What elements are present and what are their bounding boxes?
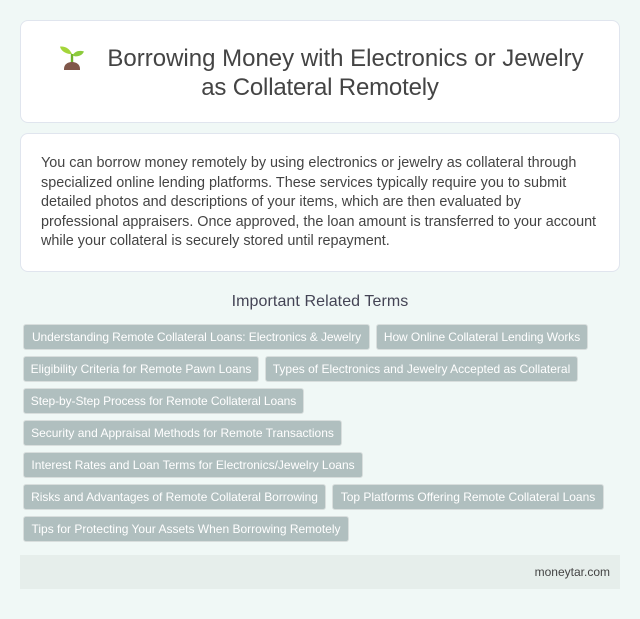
tag [23, 452, 363, 478]
tag: Eligibility Criteria for Remote Pawn Loans [31, 362, 251, 376]
panel: description [20, 133, 620, 272]
description text: professional appraisers. Once approved, the loan amount is transferred to your account [41, 214, 596, 230]
icon: seedling [60, 46, 84, 70]
title text: as Collateral Remotely [201, 74, 439, 100]
tag: How Online Collateral Lending Works [384, 330, 580, 344]
description text: specialized online lending platforms. These services typically require you to submit [41, 174, 566, 190]
tag: Step-by-Step Process for Remote Collateral Loans [31, 394, 296, 408]
tag: Security and Appraisal Methods for Remote Transactions [31, 426, 334, 440]
footer text: moneytar.com: moneytar.com [535, 565, 610, 579]
panel: title card [20, 20, 620, 123]
title text [107, 44, 584, 100]
tag [23, 388, 304, 414]
tag [23, 484, 326, 510]
description text: while your collateral is securely stored until repayment. [41, 233, 390, 249]
description text [41, 155, 596, 249]
tag [332, 484, 604, 510]
tag [23, 324, 370, 350]
description text: detailed photos and descriptions of your items, which are then evaluated by [41, 194, 521, 210]
title text: Borrowing Money with Electronics or Jewelry [107, 44, 584, 72]
tag list [23, 324, 604, 542]
description text: You can borrow money remotely by using electronics or jewelry as collateral through [41, 155, 576, 171]
heading: important related terms: Important Related Terms [232, 293, 408, 310]
tag: Tips for Protecting Your Assets When Borrowing Remotely [31, 522, 341, 536]
tag: Top Platforms Offering Remote Collateral Loans [341, 490, 595, 504]
footer bar [20, 555, 620, 589]
tag [265, 356, 578, 382]
tag: Understanding Remote Collateral Loans: Electronics & Jewelry [32, 330, 361, 344]
tag: Risks and Advantages of Remote Collateral Borrowing [31, 490, 318, 504]
tag [23, 356, 259, 382]
tag [23, 516, 349, 542]
tag: Types of Electronics and Jewelry Accepted as Collateral [273, 362, 570, 376]
tag: Interest Rates and Loan Terms for Electronics/Jewelry Loans [31, 458, 355, 472]
tag [376, 324, 588, 350]
tag [23, 420, 342, 446]
